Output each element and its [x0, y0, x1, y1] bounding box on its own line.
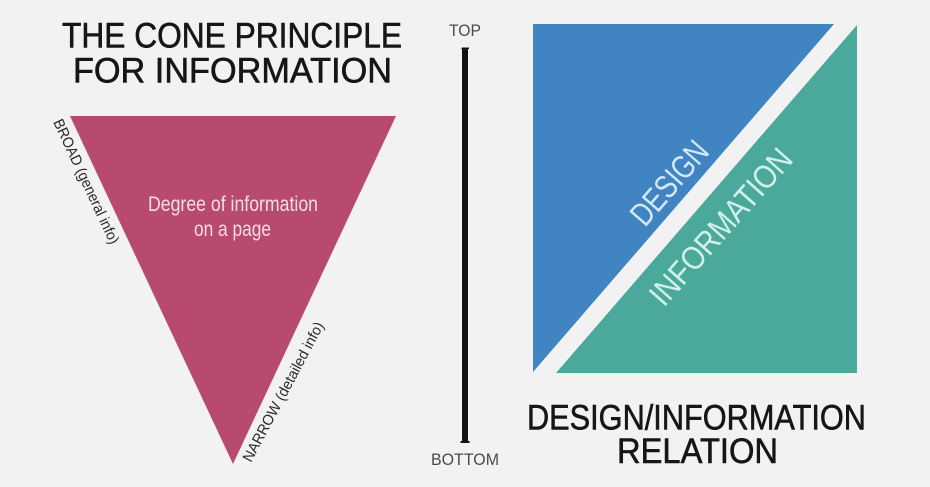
- inverted triangle cone: [70, 116, 396, 464]
- panel: top to bottom scale: [431, 21, 499, 469]
- blue design triangle: [533, 24, 834, 372]
- heading: design information relation: [527, 398, 866, 471]
- cone centre text: Degree of information: [148, 193, 318, 216]
- label: narrow: NARROW (detailed info): [240, 319, 328, 465]
- label: design: DESIGN: [622, 133, 716, 233]
- label: broad: BROAD (general info): [49, 117, 122, 247]
- cone centre text: [148, 193, 318, 241]
- panel: design information relation: [527, 24, 866, 471]
- heading: cone principle: FOR INFORMATION: [73, 52, 392, 90]
- vertical scale bar: [460, 48, 470, 443]
- cone centre text: on a page: [194, 218, 271, 241]
- heading: cone principle: THE CONE PRINCIPLE: [62, 16, 402, 56]
- heading: design information relation: DESIGN/INFORMATION: [527, 398, 866, 438]
- heading: design information relation: RELATION: [617, 432, 778, 471]
- label: top: TOP: [449, 21, 481, 40]
- panel: cone principle: [49, 16, 402, 465]
- heading: cone principle: [62, 16, 402, 90]
- label: information: INFORMATION: [642, 141, 800, 313]
- label: bottom: BOTTOM: [431, 450, 499, 469]
- green information triangle: [556, 25, 857, 373]
